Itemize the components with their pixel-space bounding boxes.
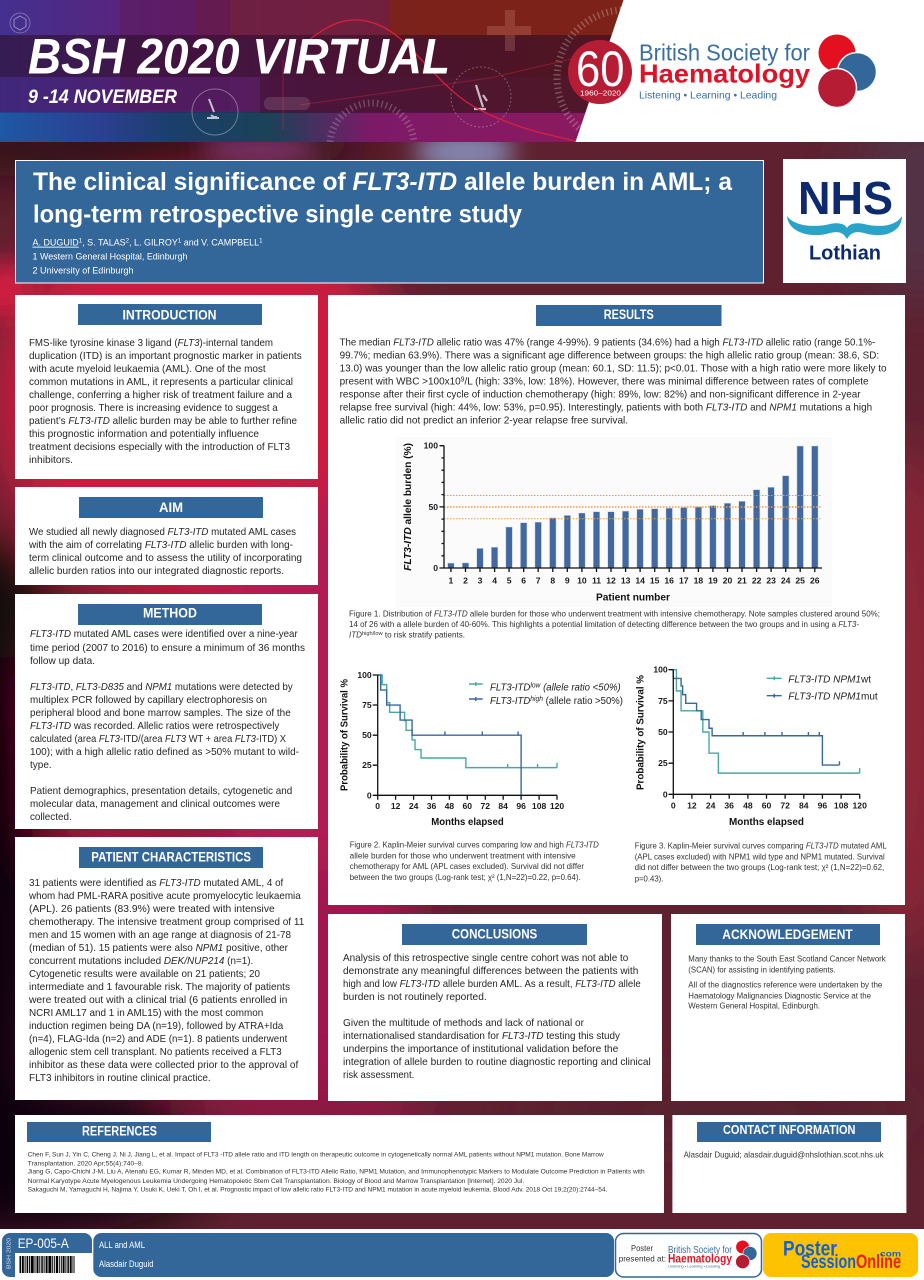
- presented at box: Listening • Learning • Leading: [668, 1264, 720, 1269]
- heading: references: REFERENCES: [82, 1123, 157, 1138]
- x axis labels: 20: [723, 575, 732, 585]
- text: patient characteristics: inhibitor as these data were collected prior to the approval of: [29, 1059, 298, 1071]
- legend: FLT3-ITD: [490, 683, 530, 694]
- text: conclusions: demonstrate any meaningful differences between the patients with: [343, 965, 638, 977]
- text: results: relapse free survival (high: 44%, low: 53%, p=0.95). Interestingly, patients with both FLT3-ITD and NPM1 mutations a high: [340, 402, 872, 414]
- text: conclusions: integration of allele burden to routine diagnostic reporting and clinical: [343, 1056, 651, 1068]
- y axis labels: [424, 441, 438, 573]
- text: results: 9: [461, 377, 465, 384]
- text: introduction: patient’s FLT3-ITD allelic burden may be able to further refine: [29, 415, 297, 427]
- chart: figure 3 Kaplan-Meier curves for NPM1 wild type and mutated: [636, 665, 878, 828]
- text: results: present with WBC >100x10: [340, 376, 467, 388]
- caption: figure 2: Figure 2. Kaplin-Meier survival curves comparing low and high FLT3-ITD: [350, 841, 599, 850]
- title panel: [16, 160, 764, 283]
- x axis labels: 23: [766, 575, 776, 585]
- caption: figure 1: [349, 610, 880, 639]
- y axis labels: 25: [658, 758, 668, 768]
- icon: header decorations: [10, 6, 621, 142]
- text: introduction: common mutations in AML, it represents a particular clinical: [29, 376, 293, 388]
- text: acknowledgement: All of the diagnostics reference were undertaken by the: [688, 980, 882, 990]
- text: patient characteristics: men and 15 women with an age range at diagnosis of 21-78: [29, 929, 291, 941]
- text: method: [30, 628, 305, 823]
- logo: PosterSessionOnline: .com: [877, 1250, 901, 1259]
- white logo area: [576, 0, 924, 142]
- x axis labels: 84: [498, 801, 508, 811]
- text: results: 13.0) was younger than the low allelic ratio group (mean: 60.1, SD: 11.5); p<0.01. Those with a high ratio were more likely to: [340, 363, 887, 375]
- caption: figure 1: ITD: [349, 630, 362, 639]
- x axis labels: 12: [687, 800, 697, 810]
- text: results: /L (high: 33%, low: 18%). However, there was minimal difference between rates of complete: [464, 376, 869, 388]
- text: patient characteristics: 31 patients were identified as FLT3-ITD mutated AML, 4 of: [29, 877, 283, 889]
- x axis title: Patient number: [596, 593, 670, 604]
- authors and affiliations: , L. GILROY: [129, 238, 178, 248]
- text: patient characteristics: FLT3 inhibitors in routine clinical practice.: [29, 1072, 211, 1084]
- axes: [440, 446, 822, 572]
- text: patient characteristics: were treated out with a clinical trial (6 patients enrolled in: [28, 994, 287, 1006]
- y axis labels: 100: [653, 665, 668, 675]
- y axis labels: 50: [428, 502, 438, 512]
- poster title: The clinical significance of FLT3-ITD allele burden in AML; a: [33, 168, 733, 196]
- logo: PosterSessionOnline: Poster: [783, 1238, 837, 1261]
- x axis labels: 120: [550, 801, 564, 811]
- heading: contact information: [697, 1122, 881, 1142]
- x axis labels: 24: [706, 800, 716, 810]
- legend: FLT3-ITD: [490, 696, 530, 707]
- heading: references: [27, 1122, 211, 1142]
- text: conclusions: high and low FLT3-ITD allele burden AML. As a result, FLT3-ITD allele: [343, 978, 641, 990]
- presented at box: British Society for: [668, 1244, 732, 1256]
- x axis labels: 16: [664, 575, 674, 585]
- text: method: peripheral blood and bone marrow samples. The size of the: [30, 707, 291, 719]
- text: patient characteristics: [28, 877, 304, 1084]
- text: conclusions: internationalised standardisation for FLT3-ITD testing this study: [343, 1030, 621, 1042]
- y axis title: Probability of Survival %: [339, 679, 350, 791]
- curve: NPM1 mutated: [673, 670, 839, 765]
- caption: figure 1: 14 of 26 with a allele burden of 40-60%. This highlights a potential limitation of detecting difference between the two groups and in using a FLT3-: [349, 620, 859, 629]
- presented at box: Poster: [631, 1243, 653, 1253]
- text: references: [28, 1152, 645, 1194]
- presented at box: [616, 1234, 762, 1277]
- text: results: 99.7%; median 63.9%). There was a significant age difference between groups: the high allelic ratio group (mean: 38.6, SD:: [340, 350, 879, 362]
- x axis labels: [375, 801, 564, 811]
- x axis labels: 72: [780, 800, 790, 810]
- authors and affiliations: 1: [178, 239, 182, 245]
- x axis labels: 18: [694, 575, 703, 585]
- heading: introduction: INTRODUCTION: [122, 307, 216, 322]
- x axis labels: 60: [762, 800, 771, 810]
- panel: contact information: [672, 1115, 906, 1213]
- x axis labels: 36: [427, 801, 436, 811]
- text: method: molecular data, management and clinical outcomes were: [30, 798, 280, 810]
- heading: conclusions: [402, 924, 587, 945]
- logo: British Society for Haematology: 1960–2020: [580, 90, 621, 98]
- x axis labels: 1: [449, 575, 454, 585]
- poster id box: [2, 1233, 92, 1277]
- authors and affiliations: , S. TALAS: [82, 238, 126, 248]
- heading: patient characteristics: [79, 847, 263, 868]
- text: aim: [28, 526, 302, 577]
- text: introduction: duplication (ITD) is an important prognostic marker in patients: [29, 350, 302, 362]
- text: references: Sakaguchi M, Yamaguchi H, Najima Y, Usuki K, Ueki T, Oh I, et al. Prognostic impact of low allelic ratio FLT3-ITD and NPM1 mutation in acute myeloid leukemia. Blood Adv. 2018 Oct 19;2(20):2744–54.: [28, 1187, 608, 1194]
- x axis labels: 26: [810, 575, 820, 585]
- authors and affiliations: 1: [79, 239, 83, 245]
- text: method: FLT3-ITD, FLT3-D835 and NPM1 mutations were detected by: [30, 681, 293, 693]
- text: introduction: this prognostic information and potentially influence: [29, 428, 259, 440]
- x axis labels: 12: [391, 801, 401, 811]
- x axis labels: [671, 800, 867, 810]
- heading: contact information: CONTACT INFORMATION: [723, 1123, 855, 1137]
- y axis labels: 75: [658, 696, 668, 706]
- panel: introduction: [15, 295, 318, 479]
- text: patient characteristics: concurrent mutations included DEK/NUP214 (n=1).: [29, 955, 253, 967]
- curve: NPM1 wild type: [673, 670, 860, 773]
- authors and affiliations: A. DUGUID: [32, 238, 79, 248]
- text: method: collected.: [30, 811, 72, 823]
- y axis labels: [653, 665, 668, 799]
- heading: results: RESULTS: [604, 307, 654, 322]
- y axis labels: 50: [362, 730, 372, 740]
- y axis labels: 100: [357, 670, 372, 680]
- x axis labels: 108: [834, 800, 848, 810]
- heading: introduction: [78, 304, 262, 325]
- x axis labels: 9: [565, 575, 570, 585]
- text: aim: We studied all newly diagnosed FLT3-ITD mutated AML cases: [29, 526, 296, 538]
- logo: NHS Lothian: NHS: [798, 172, 893, 224]
- text: references: Transplantation. 2020 Apr;55(4):740–8.: [28, 1160, 144, 1167]
- caption: figure 3: Figure 3. Kaplin-Meier survival curves comparing FLT3-ITD mutated AML: [635, 842, 887, 851]
- text: patient characteristics: allogenic stem cell transplant. No patients received a FLT3: [29, 1046, 282, 1058]
- text: aim: term clinical outcome and to assess the utility of incorporating: [29, 552, 302, 564]
- session details box: Alasdair Duguid: [99, 1259, 154, 1269]
- text: results: [340, 337, 887, 427]
- x axis labels: 5: [507, 575, 512, 585]
- text: aim: with the aim of correlating FLT3-ITD allelic burden with long-: [28, 539, 293, 551]
- y axis labels: [357, 670, 372, 800]
- text: conclusions: burden is not routinely reported.: [343, 991, 487, 1003]
- text: aim: allelic burden ratios into our integrated diagnostic reports.: [29, 565, 284, 577]
- text: method: FLT3-ITD mutated AML cases were identified over a nine-year: [30, 628, 298, 640]
- logo: NHS Lothian: Lothian: [809, 242, 881, 264]
- text: method: 100); with a high allelic ratio defined as >50% mutant to wild-: [30, 746, 299, 758]
- x axis title: Months elapsed: [431, 817, 504, 828]
- legend: [767, 674, 878, 703]
- y axis labels: 100: [424, 441, 438, 451]
- conference title: BSH 2020 VIRTUAL: [28, 28, 450, 84]
- x axis labels: 72: [481, 801, 490, 811]
- x axis labels: 10: [577, 575, 587, 585]
- axes: [668, 670, 860, 799]
- text: acknowledgement: Western General Hospital, Edinburgh.: [688, 1001, 820, 1011]
- text: introduction: [28, 337, 302, 466]
- legend: (allele ratio <50%): [540, 683, 621, 694]
- poster id box: EP-005-A: [18, 1235, 69, 1251]
- text: patient characteristics: (n=4), FLAG-Ida (n=2) and ADE (n=1). 8 patients underwent: [29, 1033, 287, 1045]
- logo: NHS Lothian: [783, 159, 906, 283]
- text: results: The median FLT3-ITD allelic ratio was 47% (range 4-99%). 9 patients (34.6%) had a high FLT3-ITD allelic ratio (range 50.1%-: [340, 337, 876, 349]
- text: introduction: inhibitors.: [29, 454, 73, 466]
- chart: figure 1 bar chart of allele burden: [396, 437, 832, 607]
- legend: [469, 682, 623, 707]
- logo: British Society for Haematology: Listening • Learning • Leading: [639, 89, 777, 101]
- x axis labels: 24: [409, 801, 419, 811]
- logo: PosterSessionOnline: [763, 1233, 918, 1277]
- heading: acknowledgement: [696, 924, 880, 945]
- x axis labels: 6: [521, 575, 526, 585]
- poster title: [33, 168, 733, 229]
- text: method: time period (2007 to 2016) to ensure a minimum of 36 months: [30, 642, 305, 654]
- authors and affiliations: 2: [126, 239, 130, 245]
- x axis labels: 11: [592, 575, 601, 585]
- curve: FLT3-ITD low: [378, 675, 557, 768]
- x axis labels: 96: [516, 801, 526, 811]
- y axis labels: 0: [663, 789, 668, 799]
- heading: conclusions: CONCLUSIONS: [452, 926, 537, 941]
- panel: conclusions: [328, 914, 662, 1101]
- caption: figure 3: did not differ between the two groups (Log-rank test; χ² (1,N=22)=0.62,: [635, 863, 884, 872]
- panel: acknowledgement: [671, 914, 905, 1101]
- panel: results: [328, 295, 905, 905]
- x axis title: Months elapsed: [729, 817, 804, 828]
- text: conclusions: underpins the importance of institutional validation before the: [343, 1043, 618, 1055]
- text: conclusions: Given the multitude of methods and lack of national or: [343, 1017, 584, 1029]
- text: patient characteristics: whom had PML-RARA positive acute promyelocytic leukaemia: [28, 890, 301, 902]
- caption: figure 2: between the two groups (Log-rank test; χ² (1,N=22)=0.22, p=0.64).: [350, 873, 581, 882]
- conference title: 9 -14 NOVEMBER: [28, 86, 177, 108]
- x axis labels: 48: [743, 800, 753, 810]
- panel: references: [15, 1115, 664, 1213]
- poster id box: BSH 2020: [6, 1238, 12, 1269]
- text: conclusions: [343, 952, 651, 1081]
- legend: FLT3-ITD NPM1mut: [788, 692, 878, 703]
- y axis labels: 50: [658, 727, 668, 737]
- text: introduction: FMS-like tyrosine kinase 3 ligand (FLT3)-internal tandem: [29, 337, 273, 349]
- x axis labels: 120: [853, 800, 867, 810]
- conference title: [28, 28, 450, 108]
- x axis labels: 2: [463, 575, 468, 585]
- logo: British Society for Haematology: 60: [576, 41, 624, 97]
- text: acknowledgement: Haematology Malignancies Diagnostic Service at the: [688, 991, 871, 1001]
- heading: method: [78, 604, 262, 625]
- panel: method: [15, 594, 318, 829]
- x axis labels: 0: [671, 800, 676, 810]
- heading: results: [536, 305, 722, 326]
- session details box: [93, 1233, 614, 1277]
- icon: barcode: [20, 1256, 75, 1273]
- text: results: allelic ratio did not predict an inferior 2-year relapse free survival.: [340, 415, 628, 427]
- text: method: type.: [30, 759, 52, 771]
- text: acknowledgement: [688, 954, 886, 1011]
- caption: figure 2: chemotherapy for AML (APL cases excluded). Survival did not differ: [350, 862, 584, 871]
- x axis labels: 84: [799, 800, 809, 810]
- text: results: response after their first cycle of induction chemotherapy (high: 89%, low: 82%) and non-significant difference in 2-year: [340, 389, 861, 401]
- text: references: Chen F, Sun J, Yin C, Cheng J, Ni J, Jiang L, et al. Impact of FLT3 -ITD allele ratio and ITD length on therapeutic outcome in cytogenetically normal AML patients without NPM1 mutation. Bone Marrow: [28, 1152, 604, 1159]
- heading: method: METHOD: [143, 606, 197, 621]
- logo: British Society for Haematology: British Society for: [639, 40, 810, 66]
- panel: aim: [15, 487, 318, 585]
- authors and affiliations: 2 University of Edinburgh: [32, 266, 134, 276]
- authors and affiliations: 1 Western General Hospital, Edinburgh: [32, 252, 188, 262]
- text: patient characteristics: NCRI AML17 and 1 in AML15) with the most common: [29, 1007, 263, 1019]
- x axis labels: 48: [445, 801, 454, 811]
- text: introduction: challenge, conferring a higher risk of treatment failure and a: [29, 389, 292, 401]
- text: patient characteristics: (APL). 26 patients (83.9%) were treated with intensive: [29, 903, 275, 915]
- y axis title: FLT3-ITD allele burden (%): [403, 443, 414, 571]
- text: conclusions: risk assessment.: [343, 1069, 414, 1081]
- footer bar: [0, 1229, 924, 1280]
- x axis labels: 12: [606, 575, 616, 585]
- caption: figure 2: [350, 841, 599, 882]
- caption: figure 2: allele burden for those who underwent treatment with intensive: [350, 852, 576, 861]
- x axis labels: 7: [536, 575, 541, 585]
- presented at box: Haematology: [668, 1254, 733, 1266]
- logo: British Society for Haematology: [568, 34, 876, 108]
- authors and affiliations: [32, 238, 263, 276]
- text: introduction: poor prognosis. There is increasing evidence to suggest a: [29, 402, 278, 414]
- text: method: FLT3-ITD was recorded. Allelic ratios were retrospectively: [30, 720, 280, 732]
- y axis labels: 0: [367, 790, 372, 800]
- y axis labels: 0: [433, 563, 438, 573]
- x axis labels: 108: [532, 801, 546, 811]
- bars: [448, 446, 818, 568]
- text: references: Jiang G, Capo-Chichi J-M, Liu A, Atenafu EG, Kumar R, Minden MD, et al. Combination of FLT3-ITD Allelic Ratio, NPM1 Mutation, and Immunophenotypic Markers to Modulate Outcome Prediction in Patients with: [28, 1169, 645, 1176]
- caption: figure 1: high/low: [362, 631, 383, 637]
- caption: figure 1: to risk stratify patients.: [383, 630, 465, 639]
- heading: acknowledgement: ACKNOWLEDGEMENT: [722, 927, 853, 942]
- y axis labels: 75: [362, 700, 372, 710]
- x axis labels: 4: [492, 575, 497, 585]
- x axis labels: 96: [818, 800, 827, 810]
- text: patient characteristics: induction regimen being DA (n=19), followed by ATRA+Ida: [29, 1020, 283, 1032]
- text: introduction: treatment decisions especially with the introduction of FLT3: [29, 441, 290, 453]
- logo: PosterSessionOnline: Session: [801, 1252, 856, 1273]
- text: patient characteristics: intermediate and 1 favourable risk. The majority of patients: [29, 981, 290, 993]
- x axis labels: 3: [478, 575, 483, 585]
- authors and affiliations: 1: [259, 239, 263, 245]
- x axis labels: 22: [752, 575, 762, 585]
- x axis labels: 36: [724, 800, 734, 810]
- heading: aim: AIM: [159, 500, 183, 515]
- caption: figure 1: Figure 1. Distribution of FLT3-ITD allele burden for those who underwent treatment with intensive chemotherapy. Note samples clustered around 50%;: [349, 610, 880, 619]
- axes: [373, 675, 557, 800]
- text: method: multiplex PCR followed by capillary electrophoresis on: [30, 694, 267, 706]
- heading: patient characteristics: PATIENT CHARACTERISTICS: [91, 850, 251, 865]
- text: acknowledgement: Many thanks to the South East Scotland Cancer Network: [688, 954, 886, 964]
- curve: FLT3-ITD high: [378, 675, 521, 795]
- text: references: Normal Karyotype Acute Myelogenous Leukemia Undergoing Hematopoietic Stem Cell Transplantation. Biology of Blood and Marrow Transplantation [Internet]. 2020 Jul.: [28, 1178, 524, 1185]
- header banner: [0, 0, 624, 142]
- heading: aim: [79, 497, 263, 518]
- x axis labels: 19: [708, 575, 718, 585]
- text: patient characteristics: (median of 51). 15 patients were also NPM1 positive, other: [29, 942, 288, 954]
- text: patient characteristics: chemotherapy. The intensive treatment group comprised of 11: [29, 916, 304, 928]
- x axis labels: 15: [650, 575, 660, 585]
- logo: British Society for Haematology: Haematology: [639, 58, 811, 88]
- text: acknowledgement: (SCAN) for assisting in identifying patients.: [688, 965, 836, 975]
- x axis labels: 0: [375, 801, 380, 811]
- chart: figure 2 Kaplan-Meier curves for FLT3-ITD low and high: [339, 670, 623, 828]
- caption: figure 3: [635, 842, 887, 883]
- x axis labels: 24: [781, 575, 791, 585]
- reference lines at 40, 50 and 60 percent: [444, 496, 822, 519]
- panel: patient characteristics: [15, 837, 318, 1100]
- x axis labels: 21: [737, 575, 747, 585]
- text: conclusions: Analysis of this retrospective single centre cohort was not able to: [343, 952, 628, 964]
- text: method: Patient demographics, presentation details, cytogenetic and: [30, 785, 292, 797]
- x axis labels: 60: [463, 801, 472, 811]
- text: method: follow up data.: [30, 655, 95, 667]
- presented at box: presented at:: [619, 1254, 666, 1264]
- x axis labels: 25: [795, 575, 805, 585]
- x axis labels: [449, 575, 820, 585]
- x axis labels: 13: [621, 575, 631, 585]
- x axis labels: 17: [679, 575, 689, 585]
- x axis labels: 14: [635, 575, 645, 585]
- poster title: long-term retrospective single centre study: [33, 201, 522, 229]
- authors and affiliations: and V. CAMPBELL: [181, 238, 259, 248]
- y axis labels: 25: [362, 760, 372, 770]
- session details box: ALL and AML: [99, 1240, 145, 1250]
- logo: PosterSessionOnline: Online: [856, 1252, 901, 1273]
- x axis labels: 8: [550, 575, 555, 585]
- legend: high: [530, 696, 543, 703]
- text: contact details: Alasdair Duguid; alasdair.duguid@nhslothian.scot.nhs.uk: [684, 1151, 884, 1160]
- caption: figure 3: (APL cases excluded) with NPM1 wild type and NPM1 mutated. Survival: [635, 853, 885, 862]
- text: introduction: with acute myeloid leukaemia (AML). One of the most: [28, 363, 266, 375]
- legend: FLT3-ITD NPM1wt: [788, 674, 871, 685]
- caption: figure 3: p=0.43).: [635, 874, 663, 883]
- text: patient characteristics: Cytogenetic results were available on 21 patients; 20: [29, 968, 260, 980]
- y axis title: Probability of Survival %: [636, 675, 647, 790]
- text: method: calculated (area FLT3-ITD/(area FLT3 WT + area FLT3-ITD) X: [30, 733, 286, 745]
- legend: (allele ratio >50%): [543, 696, 623, 707]
- legend: low: [530, 683, 541, 690]
